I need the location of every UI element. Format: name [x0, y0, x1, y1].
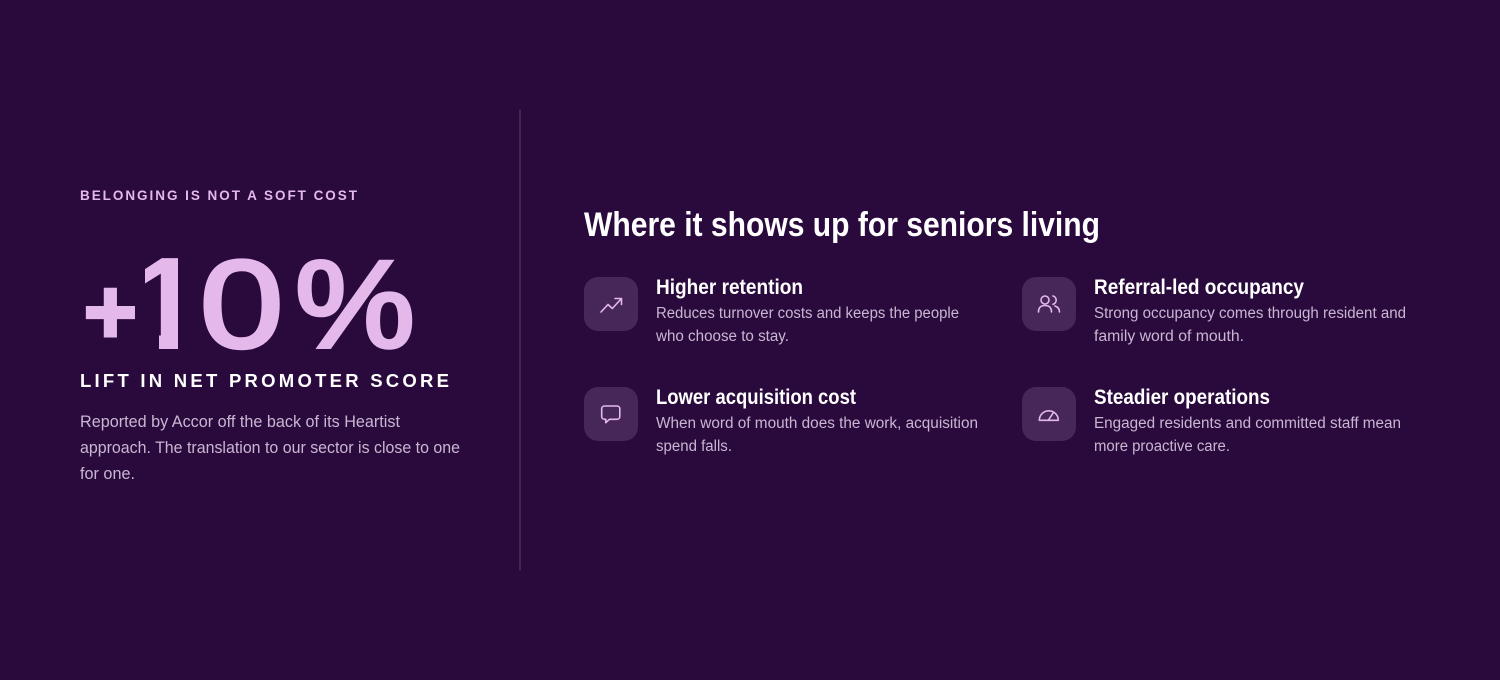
card text: steadier operations [1094, 386, 1401, 455]
card: referral-led occupancy [1022, 276, 1406, 345]
card text: lower acquisition cost: When word of mouth does the work, acquisition [656, 415, 978, 432]
big stat: +10%: % [295, 236, 415, 374]
card: higher retention [584, 276, 959, 345]
icon: trending up [584, 277, 638, 331]
eyebrow label: BELONGING IS NOT A SOFT COST [80, 188, 358, 203]
card text: referral-led occupancy: Strong occupancy comes through resident and [1094, 305, 1406, 322]
card text: higher retention: who choose to stay. [655, 328, 789, 345]
stat description: for one. [80, 465, 135, 483]
card text: steadier operations: Engaged residents and committed staff mean [1094, 415, 1401, 432]
card text: referral-led occupancy [1094, 276, 1406, 345]
stat caption: LIFT IN NET PROMOTER SCORE [80, 370, 449, 391]
card text: steadier operations: more proactive care. [1094, 438, 1230, 455]
stat description: approach. The translation to our sector is close to one [80, 439, 460, 457]
card text: steadier operations: Steadier operations [1094, 386, 1270, 409]
big stat: +10%: 0 [200, 236, 283, 374]
card text: higher retention: Reduces turnover costs and keeps the people [656, 305, 959, 322]
stat description [80, 413, 460, 483]
big stat: +10%: 1 [130, 230, 203, 377]
card: steadier operations [1022, 386, 1401, 455]
stat description: Reported by Accor off the back of its Heartist [80, 413, 400, 431]
big stat: +10%: + [84, 261, 137, 363]
card text: higher retention [655, 276, 959, 345]
icon: speech bubble [584, 387, 638, 441]
card text: lower acquisition cost: Lower acquisition cost [656, 386, 856, 409]
icon: people [1022, 277, 1076, 331]
section heading: Where it shows up for seniors living [584, 206, 1100, 244]
left panel: headline stat [80, 188, 460, 483]
card text: referral-led occupancy: Referral-led occupancy [1094, 276, 1304, 299]
card text: higher retention: Higher retention [656, 276, 803, 299]
card text: referral-led occupancy: family word of mouth. [1094, 328, 1244, 345]
card: lower acquisition cost [584, 386, 978, 455]
icon: gauge [1022, 387, 1076, 441]
big stat: +10% [86, 258, 412, 350]
card text: lower acquisition cost: spend falls. [656, 438, 732, 455]
right panel: where it shows up [584, 206, 1406, 455]
card text: lower acquisition cost [656, 386, 978, 455]
